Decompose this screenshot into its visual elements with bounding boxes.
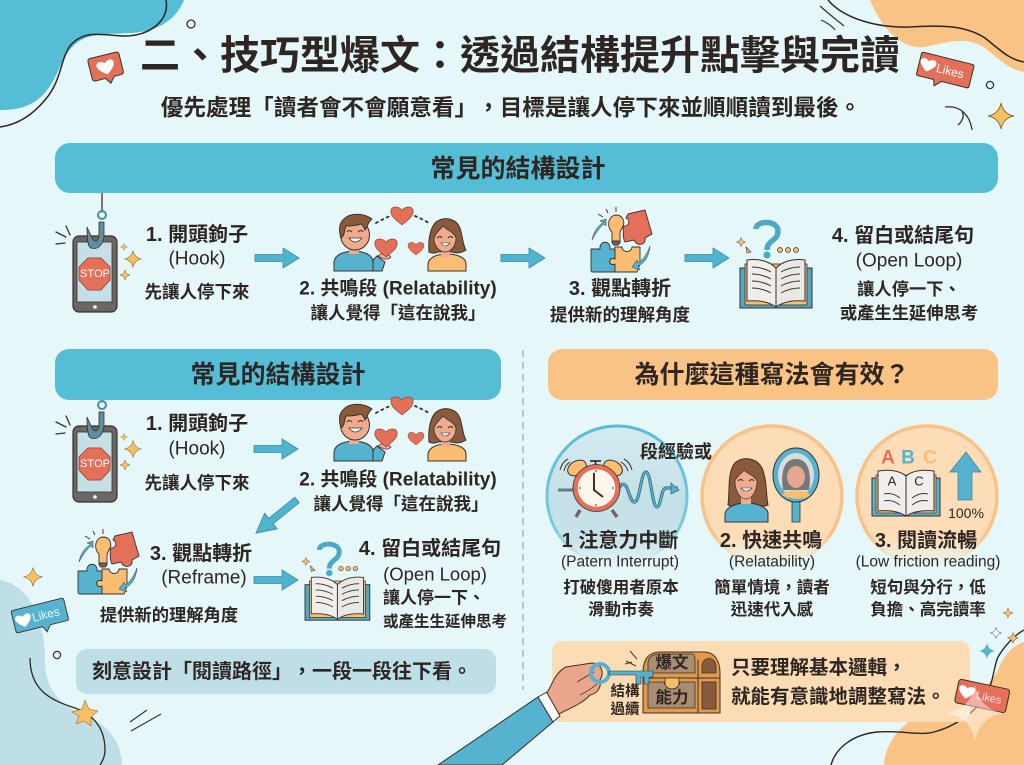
step 1 text: 1. 開頭鉤子	[146, 222, 248, 246]
icon: treasure chest: 過續	[610, 700, 640, 718]
callout: understand the logic: 就能有意識地調整寫法。	[731, 685, 946, 708]
item 3 text: 短句與分行，低	[870, 577, 986, 597]
step 4 text: 讓人停一下、	[383, 588, 485, 608]
circle: flow	[857, 426, 997, 566]
icon: teal likes badge: Likes	[31, 604, 61, 625]
step 3 text: (Reframe)	[161, 568, 247, 588]
heading bar: why it works: 為什麼這種寫法會有效？	[634, 360, 910, 389]
icon: book with letters and up arrow: 100%	[948, 505, 984, 521]
icon: book with letters and up arrow: A	[888, 474, 897, 488]
item 2 text	[714, 529, 830, 619]
item 3 text	[856, 529, 1000, 619]
icon: puzzle and bulb	[591, 207, 652, 272]
arrow	[501, 248, 545, 268]
step 4 text	[359, 536, 507, 630]
step 1 text: (Hook)	[168, 248, 226, 270]
callout: reading path	[76, 649, 496, 694]
heading bar: structure design	[55, 143, 998, 193]
subtitle: 優先處理「讀者會不會願意看」，目標是讓人停下來並順順讀到最後。	[161, 94, 861, 120]
step 4 text: 4. 留白或結尾句	[359, 536, 501, 560]
step 4 text: 或產生生延伸思考	[840, 303, 978, 323]
panel: structure row 2	[55, 349, 507, 694]
item 1 text: (Patern Interrupt)	[561, 554, 679, 570]
step 2 text	[299, 276, 497, 323]
panel: why it works	[438, 349, 1010, 765]
icon: treasure chest: 爆文	[656, 652, 689, 672]
item 2 text: 2. 快速共鳴	[720, 529, 822, 552]
icon: red likes badge	[915, 52, 974, 94]
step 3 text: 提供新的理解角度	[550, 305, 690, 325]
divider	[522, 350, 524, 690]
step 4 text: 讓人停一下、	[857, 279, 961, 299]
step 4 text: 或產生生延伸思考	[383, 612, 507, 630]
item 3 text: 3. 閱讀流暢	[875, 529, 977, 552]
step 3 text: 3. 觀點轉折	[569, 277, 671, 300]
arrow	[254, 439, 298, 459]
icon: red likes badge with sparkle: Likes	[975, 690, 1003, 707]
step 1 text	[144, 222, 250, 302]
icon: book with letters and up arrow	[872, 448, 984, 521]
step 3 text	[550, 277, 690, 325]
step 2 text	[299, 468, 497, 514]
arrow	[254, 570, 298, 590]
icon: two people with hearts	[334, 397, 466, 461]
heading bar: structure design: 常見的結構設計	[430, 155, 606, 183]
arrow	[685, 248, 729, 268]
item 2 text: 簡單情境，讀者	[714, 577, 830, 597]
step 2 text: 讓人覺得「這在說我」	[314, 494, 488, 514]
heading bar: structure design: 常見的結構設計	[190, 361, 366, 389]
step 2 text: 讓人覺得「這在說我」	[310, 303, 486, 323]
step 1 text: 1. 開頭鉤子	[146, 411, 248, 435]
decoration: top-left blob	[0, 0, 195, 127]
decoration: top-right blob	[820, 0, 1024, 130]
icon: red likes badge with sparkle	[947, 679, 1010, 741]
icon: teal likes badge	[11, 598, 70, 639]
arrow	[255, 248, 299, 268]
step 3 text	[100, 542, 252, 625]
icon: hook and phone	[56, 190, 142, 312]
icon: hook and phone: STOP	[80, 458, 110, 470]
step 4 text: (Open Loop)	[856, 250, 962, 272]
icon: woman and mirror	[725, 448, 819, 522]
callout: understand the logic	[552, 641, 970, 722]
item 3 text: (Low friction reading)	[856, 554, 1000, 570]
icon: hook and phone: STOP	[80, 268, 110, 280]
illustration: hand with key	[438, 651, 653, 765]
step 1 text: 先讓人停下來	[144, 282, 250, 302]
heading bar: why it works	[548, 349, 998, 400]
icon: book with letters and up arrow: A	[881, 448, 895, 468]
icon: red likes badge: Likes	[935, 61, 965, 81]
icon: treasure chest: 結構	[610, 682, 640, 700]
title: 二、技巧型爆文：透過結構提升點擊與完讀	[140, 34, 900, 78]
step 3 text: 3. 觀點轉折	[150, 542, 252, 565]
step 1 text: 先讓人停下來	[144, 473, 250, 493]
heading bar: structure design	[55, 349, 501, 400]
item 1 text: 滑動市奏	[588, 599, 654, 619]
item 2 text: (Relatability)	[729, 554, 815, 570]
icon: alarm clock and wave	[558, 457, 679, 517]
item 3 text: 負擔、高完讀率	[870, 599, 986, 619]
panel: structure row 1	[55, 143, 998, 325]
item 1 text: 1 注意力中斷	[562, 528, 678, 552]
step 4 text: 4. 留白或結尾句	[832, 223, 974, 247]
callout: understand the logic: 只要理解基本邏輯，	[731, 656, 907, 679]
callout: reading path: 刻意設計「閱讀路徑」，一段一段往下看。	[92, 659, 472, 683]
stray label: 段經驗或	[640, 441, 712, 462]
arrow: diagonal	[250, 492, 303, 541]
icon: heart chat badge	[87, 52, 125, 87]
icon: hook and phone	[56, 380, 142, 502]
icon: book with letters and up arrow: C	[914, 474, 924, 488]
icon: treasure chest: 能力	[656, 688, 688, 707]
step 2 text: 2. 共鳴段 (Relatability)	[299, 276, 497, 300]
icon: open book with question	[302, 544, 370, 620]
icon: puzzle and bulb	[78, 529, 139, 594]
step 4 text: (Open Loop)	[383, 564, 487, 584]
circle: attention	[547, 426, 687, 566]
item 1 text	[561, 528, 679, 619]
step 3 text: 提供新的理解角度	[100, 605, 238, 625]
step 1 text	[144, 411, 250, 493]
step 1 text: (Hook)	[168, 438, 226, 460]
decoration: bottom-left blob	[0, 568, 161, 765]
step 2 text: 2. 共鳴段 (Relatability)	[299, 468, 497, 490]
item 1 text: 打破傻用者原本	[563, 577, 679, 597]
icon: open book with question	[736, 222, 812, 308]
icon: two people with hearts	[334, 207, 466, 271]
icon: book with letters and up arrow: B	[901, 448, 915, 468]
circle: relatability	[702, 426, 842, 566]
decoration: bottom-right blob	[831, 608, 1024, 765]
step 4 text	[832, 223, 978, 323]
icon: book with letters and up arrow: C	[923, 448, 937, 468]
icon: treasure chest	[610, 652, 720, 718]
item 2 text: 迅速代入感	[731, 599, 814, 619]
